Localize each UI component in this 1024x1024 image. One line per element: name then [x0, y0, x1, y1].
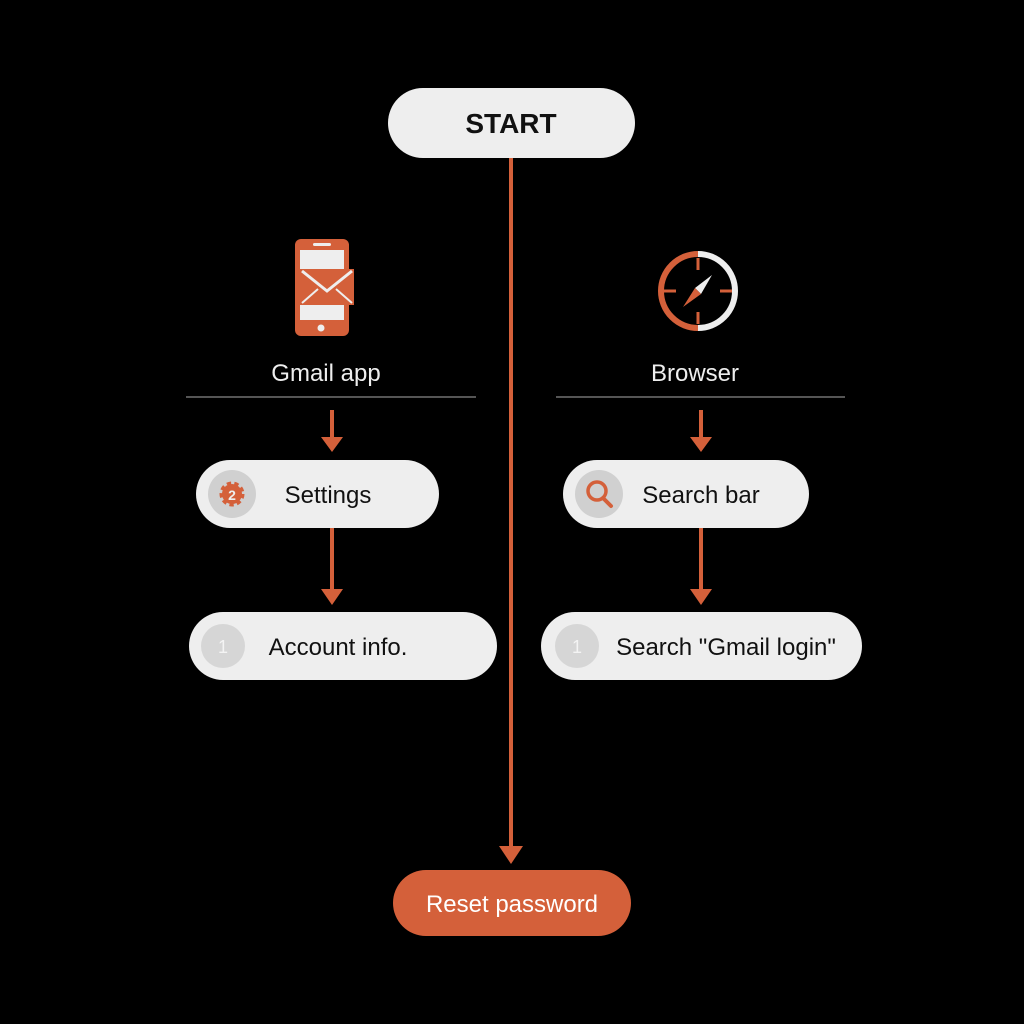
pill: Reset password: Reset password — [426, 891, 598, 918]
arrow: browser to search bar — [690, 410, 712, 452]
pill: Reset password — [393, 870, 631, 936]
heading: Browser: Browser — [651, 360, 739, 387]
pill: Settings — [196, 460, 439, 528]
pill: Search Gmail login: Search "Gmail login" — [616, 634, 836, 661]
icon: phone with envelope — [295, 239, 354, 336]
pill: Search bar — [563, 460, 809, 528]
pill: Search Gmail login: 1 — [572, 637, 582, 657]
arrow: gmail to settings — [321, 410, 343, 452]
pill: Account info: 1 — [218, 637, 228, 657]
heading: Gmail app: Gmail app — [271, 360, 381, 387]
pill: Account info — [189, 612, 497, 680]
START pill — [388, 88, 635, 158]
pill: Account info: Account info. — [269, 634, 407, 661]
pill: Search Gmail login — [541, 612, 862, 680]
arrow: main center line — [499, 158, 523, 864]
pill: Settings: 2 — [228, 487, 236, 503]
pill: Settings: Settings — [285, 482, 371, 509]
START pill: START — [465, 108, 557, 139]
pill: Search bar: Search bar — [642, 482, 760, 509]
arrow: settings to account — [321, 528, 343, 605]
arrow: search bar to search — [690, 528, 712, 605]
icon: compass — [661, 254, 735, 328]
